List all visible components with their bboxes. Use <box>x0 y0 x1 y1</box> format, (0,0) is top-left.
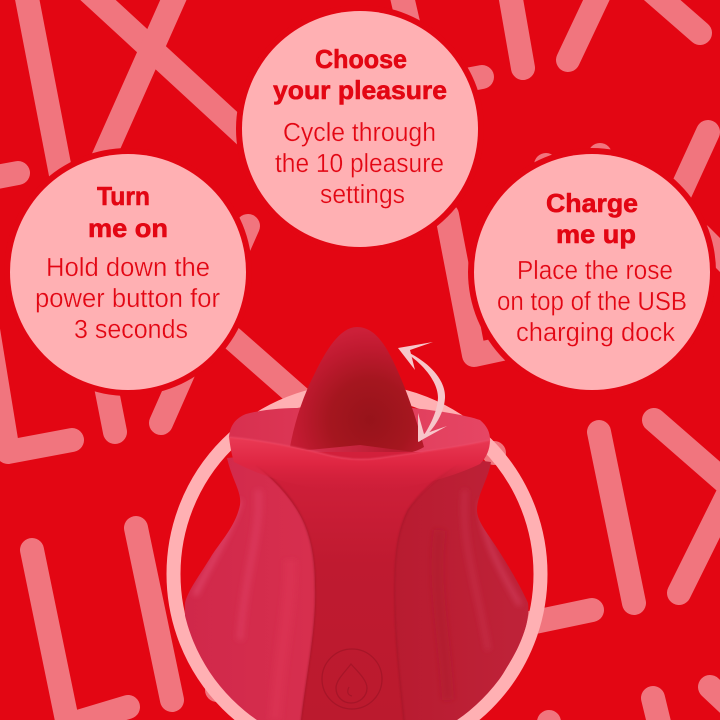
callout: choose your pleasure <box>236 5 484 253</box>
heading: Turn <box>97 181 150 211</box>
centre panel <box>270 452 440 720</box>
rose power button icon <box>322 649 382 709</box>
heading: Choose <box>315 44 407 74</box>
callout: charge me up: me up <box>556 219 636 249</box>
petal seams <box>268 475 442 720</box>
callout: turn me on: me on <box>88 213 168 243</box>
callout: choose your pleasure: settings <box>320 181 405 209</box>
double-headed rotation arrow <box>398 342 447 442</box>
rose back lip <box>229 408 490 458</box>
body text: Hold down the <box>46 254 210 282</box>
callout: turn me on: power button for <box>35 285 221 313</box>
rose tongue <box>290 327 424 458</box>
body text: Cycle through <box>283 119 436 147</box>
rose front rim <box>229 437 490 492</box>
callout: charge me up: charging dock <box>516 319 675 347</box>
callout: charge me up <box>468 148 716 396</box>
product: rose <box>180 327 535 720</box>
callout: choose your pleasure: the 10 pleasure <box>275 150 444 178</box>
callout: turn me on: 3 seconds <box>74 316 188 344</box>
rose body <box>180 440 535 720</box>
heading: Charge <box>546 188 638 218</box>
callout: choose your pleasure: your pleasure <box>273 75 447 105</box>
callout: turn me on <box>4 148 252 396</box>
left petal highlights <box>193 492 261 638</box>
large ring behind product <box>174 390 540 720</box>
right petal ribs <box>462 494 522 646</box>
body text: Place the rose <box>517 257 673 285</box>
callout: charge me up: on top of the USB <box>497 288 687 316</box>
